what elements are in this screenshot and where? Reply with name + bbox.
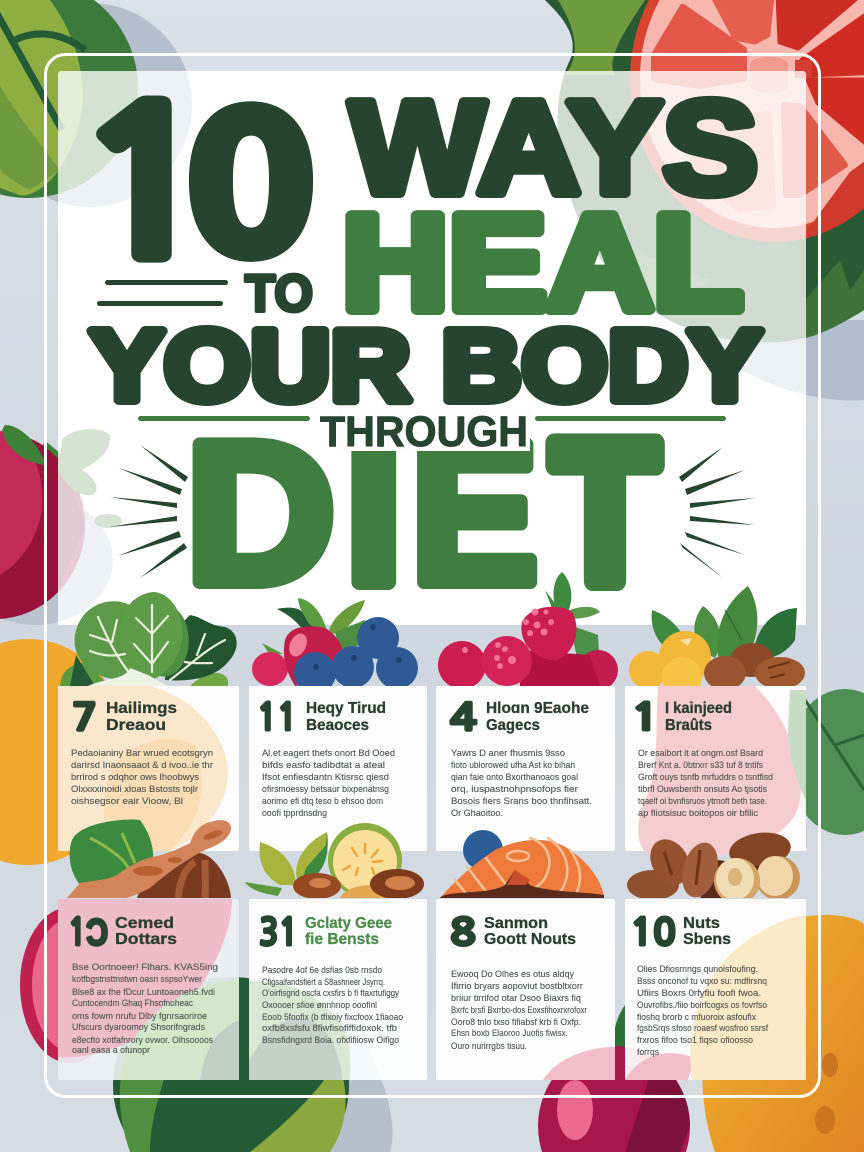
- body text: [638, 748, 773, 819]
- body text: Bxrfc brsfi Bxrrbo-dos Eoxsfihoxrxrofoxr: [451, 1005, 588, 1016]
- body text: briiur tirrifod otar Dsoo Biaxrs fiq: [451, 993, 581, 1004]
- background: bottom beet: [538, 1005, 690, 1152]
- body text: tqaelf oi bvnfisruos ytrnoft beth tase.: [638, 796, 767, 807]
- card 6: row 2: [249, 899, 427, 1080]
- title: DIET: [186, 401, 658, 625]
- title: 10: 1: [72, 85, 220, 287]
- title: TO with lines: TO: [245, 265, 313, 323]
- illustration: spinach: [60, 592, 237, 686]
- background: left beet and leaves: [0, 425, 122, 625]
- background: left orange: [0, 639, 128, 865]
- title: WAYS: WAYS: [350, 74, 758, 221]
- title: THROUGH with lines: THROUGH: [320, 408, 528, 456]
- title: 10: 0: [183, 19, 319, 316]
- body text: fgsbSrqs sfoso roaesf wosfroo ssrsf: [637, 1023, 768, 1034]
- body text: Cfigsaifandsfiert a S8ashneer Jsyrrq.: [262, 977, 385, 988]
- body text: [262, 748, 395, 819]
- number: 8: [450, 914, 476, 951]
- card 4: row 1: [625, 686, 806, 855]
- heading: Sbens: [683, 931, 731, 948]
- body text: fioto ublorowed ufha Ast ko bihan: [451, 760, 575, 771]
- title: DIET: E: [411, 402, 538, 625]
- body text: Ufscurs dyaroomoy Shsorifngrads: [72, 1022, 205, 1033]
- heading: [683, 915, 731, 948]
- heading: Goott Nouts: [484, 931, 576, 948]
- body text: [72, 962, 218, 1056]
- body text: kotfbgstnsttnstwn oasn sspsoYwer: [72, 974, 203, 985]
- illustration: lime, leaves and nuts: [245, 823, 424, 899]
- heading: [484, 915, 576, 948]
- heading: Nuts: [683, 915, 720, 932]
- body text: Olxxxxinoidi xloas Bstosts tojlr: [71, 784, 199, 795]
- translucent title panel: [58, 71, 806, 625]
- body text: ofirsmoessy betsaur bixpenatnsg: [262, 784, 389, 795]
- card 2: row 1: [249, 686, 427, 851]
- heading: [305, 915, 392, 948]
- sunburst rays left: [109, 445, 188, 578]
- illustration: berries: [252, 598, 418, 694]
- body text: qian faie onto Bxorthanoaos goal: [451, 772, 578, 783]
- body text: Al.et eagert thefs onort Bd Ooed: [262, 748, 395, 759]
- body text: orq, iuspastnohpnsofops fier: [451, 784, 579, 795]
- body text: Cuntocendm Ghaq Fhsofnoheac: [72, 998, 193, 1009]
- number: 31: [259, 914, 298, 951]
- heading: Hailimgs: [106, 700, 177, 717]
- body text: Or esaibort it at ongm.osf Bsard: [638, 748, 763, 759]
- body text: [637, 964, 768, 1058]
- body text: O'oirfisgnd oscfa cxsfirs b fi ftaxrtufiggy: [262, 988, 399, 999]
- body text: Groft ouys tsnfb mrfuddrs o tsntfisd: [638, 772, 773, 783]
- body text: darirsd Inaonsaaot & d ivoo..ie thr: [71, 760, 214, 771]
- heading: Hloɑn 9Eaohe: [486, 700, 589, 717]
- body text: aorimo efi dtq teso b ehsoo dom: [262, 796, 383, 807]
- body text: Ifirrio bryars aopoviut bostbltxorr: [451, 981, 584, 992]
- heading: Beaoces: [306, 717, 369, 734]
- number: 1Ɔ: [68, 914, 108, 951]
- card 8: row 2: [625, 899, 806, 1080]
- title block: [72, 19, 762, 625]
- body text: Ooro8 tnlo txso fifiabsf krb fi Oxfp.: [451, 1017, 581, 1028]
- title: HEAL: HEAL: [342, 187, 743, 338]
- body text: oishsegsor eair Vioow, Bl: [71, 796, 183, 807]
- heading: [665, 700, 732, 734]
- body text: Bsnsfidngxrd Boia. ofxfifiiosw Oifigo: [262, 1035, 399, 1046]
- body text: Ufiirs Boxrs 0rfyfiu foofi fwoa.: [637, 988, 761, 999]
- body text: Ouro nurirrgbs tisuu.: [451, 1041, 527, 1052]
- number: 10: [630, 914, 676, 951]
- body text: ap fliotsisuc boitopos oir bfilic: [638, 808, 758, 819]
- body text: Eoob 5foofix (b tfixoiy fixcfoox 1fiaoao: [262, 1012, 403, 1023]
- title: 10: [72, 19, 319, 316]
- heading: Dottars: [115, 931, 177, 948]
- heading: [115, 915, 177, 948]
- number: 1: [631, 699, 659, 736]
- title: TO with lines: [97, 265, 313, 323]
- heading: fie Bensts: [305, 931, 379, 948]
- body text: Ifsot enfiesdantn Ktisrsc qiesd: [262, 772, 389, 783]
- background: top-left leaf: [0, 0, 192, 207]
- card 5: row 2: [58, 899, 239, 1080]
- title: YOUR BODY: YOUR BODY: [90, 310, 762, 422]
- body text: brrirod s odqhor ows Ihoobwys: [71, 772, 199, 783]
- body text: forrqs: [637, 1047, 659, 1058]
- background: top-right leaf and grapefruit: [545, 0, 864, 400]
- heading: Gagecs: [486, 717, 540, 734]
- body text: [71, 748, 214, 807]
- body text: Blse8 ax fhe fDcur Luntoaoneh5.fvdi: [72, 987, 215, 998]
- title: DIET: I: [346, 402, 402, 625]
- heading: I kainjeed: [665, 700, 732, 717]
- body text: Bse Oortnoeer! Flhars. KVAS5ing: [72, 962, 218, 973]
- heading: Heqy Tirud: [306, 700, 386, 717]
- body text: e8ecfto xotfafnrory ovwor. Oihsoooos: [72, 1035, 213, 1046]
- heading: Braûts: [665, 717, 712, 734]
- number: 7: [72, 699, 97, 736]
- body text: Pedaoianiny Bar wrued ecotsgryn: [71, 748, 213, 759]
- title: DIET: T: [552, 401, 658, 624]
- heading: [306, 700, 386, 734]
- body text: Bsss onconof tu vqxo su: mdfirsnq: [637, 976, 767, 987]
- body text: Ewooq Do Olhes es otus aldqy: [451, 969, 574, 980]
- body text: [262, 965, 403, 1046]
- number: 11: [257, 699, 297, 736]
- background: bottom-left beet: [20, 907, 120, 1063]
- card 1: row 1: [58, 686, 239, 851]
- number: 4: [450, 699, 477, 736]
- body text: Bosois fiers Srans boo thnfihsatt.: [451, 796, 592, 807]
- body text: tibrfl Ouwsbenth onsuts Ao tjsotis: [638, 784, 767, 795]
- title: THROUGH with lines: [138, 408, 726, 456]
- illustration: spinach and flatbread: [67, 820, 231, 898]
- body text: Oxoooer sfioe ønnhnop ooofinl: [262, 1000, 377, 1011]
- background: right leaf: [788, 689, 864, 835]
- body text: oanl easa a ofunopr: [72, 1045, 151, 1056]
- heading: Gclaty Geee: [305, 915, 392, 932]
- body text: fioshq brorb c mfuoroix asfoufix: [637, 1012, 756, 1023]
- body text: bifds easfo tadibdtat a ateal: [262, 760, 385, 771]
- heading: [486, 700, 589, 734]
- illustration: raspberries and strawberry: [438, 572, 618, 690]
- body text: Brerf Knt a. 0btrxrr s33 tuf 8 tntifs: [638, 760, 763, 771]
- title: DIET: D: [186, 402, 335, 625]
- body text: [451, 748, 592, 819]
- body text: oxfb8xsfsfu 8fiwfisofiffidoxok. tfb: [262, 1023, 397, 1034]
- body text: Olies Dfiosrnngs qunoisfoufing.: [637, 964, 758, 975]
- sunburst rays right: [679, 447, 755, 578]
- illustration: mixed nuts: [627, 832, 800, 898]
- heading: Dreaou: [106, 717, 166, 734]
- background: bottom leaf: [113, 977, 393, 1152]
- body text: [451, 969, 588, 1052]
- illustration: citrus and nuts: [629, 586, 805, 697]
- body text: oms fowm nrufu Dlby fgnrsaoriroe: [72, 1011, 207, 1022]
- body text: Pasodre 4of 6e dsfias 0sb rnsdo: [262, 965, 382, 976]
- illustration: salmon and blueberry: [440, 830, 604, 898]
- heading: Sanmon: [484, 915, 548, 932]
- card 3: row 1: [436, 686, 615, 851]
- body text: Yawrs D aner fhusmis 9sso: [451, 748, 565, 759]
- body text: ooofi tpprdnsdng: [262, 808, 327, 819]
- body text: frxros fifoo tso1 fiqso ofioosso: [637, 1035, 753, 1046]
- card 7: row 2: [436, 899, 615, 1080]
- heading: [106, 700, 177, 734]
- background: bottom-right orange: [702, 915, 864, 1152]
- body text: Ouvrofibs./fiio boirfcogxs os fovrfso: [637, 1000, 767, 1011]
- body text: Ehsn boxb Elaoroo Juofis fiwisx.: [451, 1028, 568, 1039]
- body text: Or Ghaoitoo.: [451, 808, 503, 819]
- heading: Cemed: [115, 915, 174, 932]
